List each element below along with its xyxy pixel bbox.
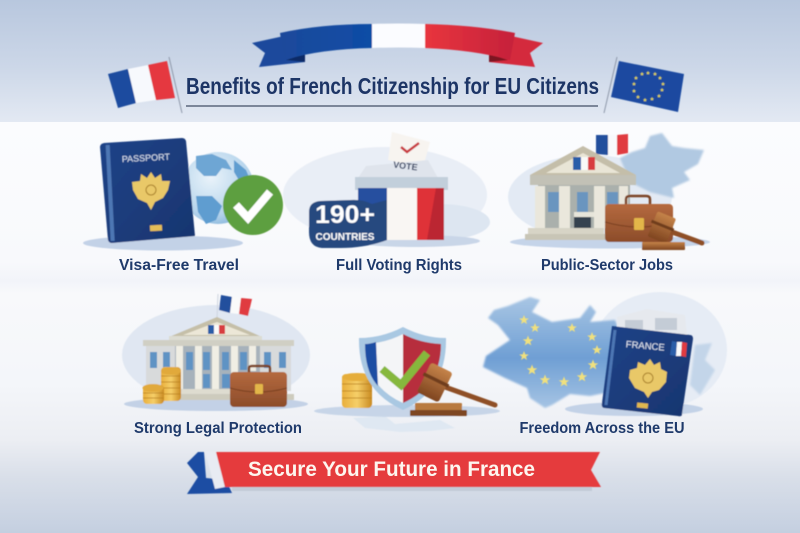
ribbon shape	[187, 451, 601, 494]
panel: freedom across the eu	[483, 292, 727, 437]
cta text: Secure Your Future in France	[248, 458, 535, 481]
icon: ballot box: 190+	[315, 201, 375, 229]
icon: ballot box: COUNTRIES	[316, 232, 375, 243]
footer ribbon	[187, 451, 601, 494]
eu flag right	[604, 57, 684, 113]
label: strong legal protection: Strong Legal Protection	[134, 420, 302, 437]
icon: passport and globe: PASSPORT	[122, 152, 171, 164]
panel: shield and gavel	[314, 327, 500, 432]
french flag left	[108, 57, 182, 113]
label: full voting rights: Full Voting Rights	[336, 257, 462, 274]
panel: strong legal protection	[122, 294, 310, 437]
panel: full voting rights	[283, 132, 490, 274]
panel: visa-free travel	[83, 138, 283, 274]
icon: passport and globe	[83, 138, 283, 250]
icon: government building, briefcase and gavel	[508, 133, 710, 250]
icon: ballot box	[283, 132, 490, 248]
icon: eu map with stars and france passport: FRANCE	[625, 339, 665, 354]
top tricolor ribbon	[252, 24, 543, 67]
label: public-sector jobs: Public-Sector Jobs	[541, 257, 673, 274]
label: visa-free travel: Visa-Free Travel	[119, 257, 239, 274]
label: freedom across the eu: Freedom Across the EU	[520, 420, 684, 437]
panel: public-sector jobs	[508, 133, 710, 274]
title: Benefits of French Citizenship for EU Citizens	[186, 73, 599, 99]
icon: ballot box: VOTE	[393, 160, 418, 172]
icon: courthouse, coins and briefcase	[122, 294, 310, 411]
icon: shield, coins and gavel	[314, 327, 500, 432]
icon: eu map with stars and france passport	[483, 292, 727, 416]
